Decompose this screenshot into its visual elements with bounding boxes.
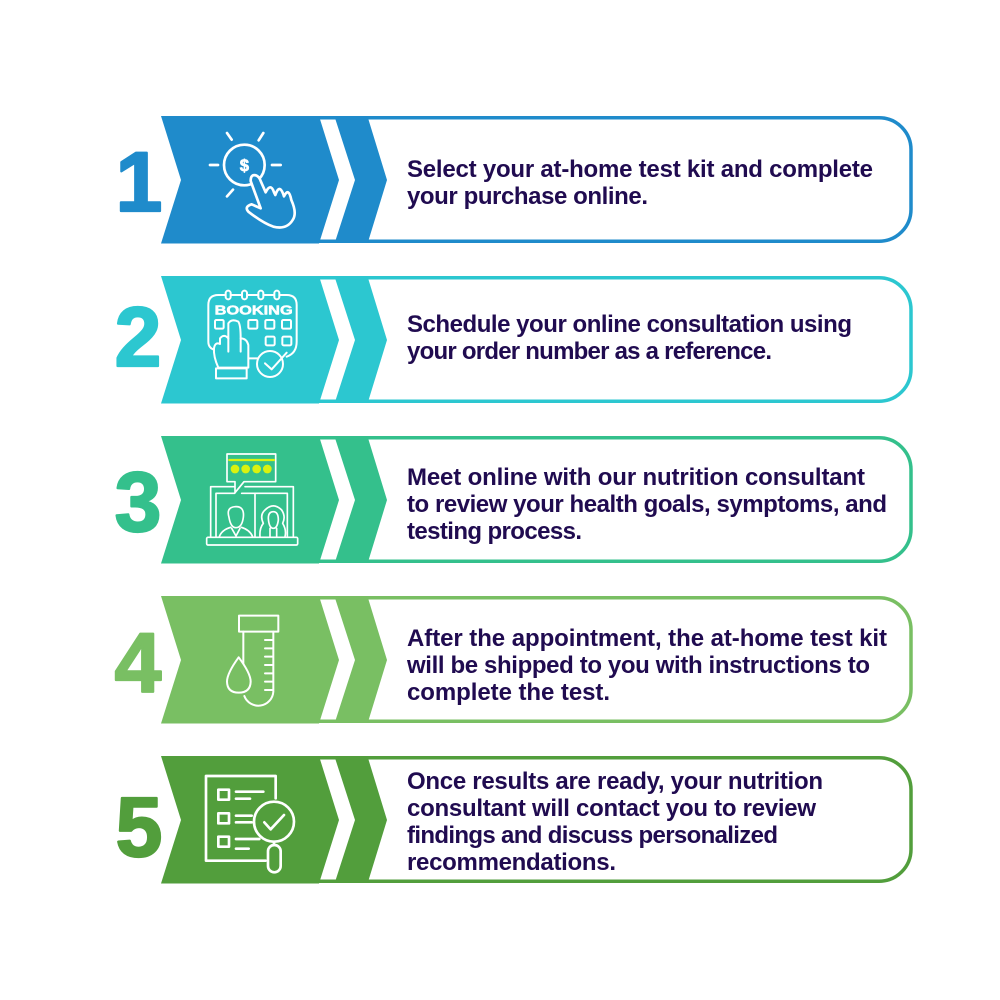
icon: hand clicking a dollar coin: $: [240, 156, 250, 175]
step 1 description: Select your at-home test kit and complete: [407, 156, 873, 183]
icon: online video consultation: [207, 454, 298, 545]
step 3 text panel: [300, 438, 911, 561]
step 1 chevron banner: [161, 116, 339, 244]
icon: booking calendar: BOOKING: [215, 302, 293, 317]
step 3 description: [407, 464, 887, 545]
step 1 number: 1: [116, 135, 162, 229]
step 4 description: [406, 625, 887, 706]
step 4 number: 4: [115, 616, 162, 710]
step 5 description: findings and discuss personalized: [407, 822, 778, 849]
step 5 description: [407, 768, 823, 876]
step 3 chevron banner: [161, 436, 339, 564]
step 2 description: your order number as a reference.: [407, 338, 772, 365]
step 2 number: 2: [115, 290, 161, 384]
step 1 row: [116, 116, 911, 244]
step 3 row: [115, 436, 911, 564]
step 3 number: 3: [115, 455, 161, 549]
step 1 description: [407, 156, 873, 210]
step 5 description: recommendations.: [407, 849, 616, 876]
step 2 description: [407, 311, 852, 365]
step 4 description: complete the test.: [407, 679, 610, 706]
step 5 number: 5: [116, 780, 162, 874]
step 2 chevron banner: [161, 276, 339, 404]
step 5 description: Once results are ready, your nutrition: [407, 768, 823, 795]
step 5 text panel: [300, 758, 911, 881]
icon: checklist with magnifier: [206, 776, 294, 872]
step 2 second chevron: [335, 278, 387, 402]
step 3 description: to review your health goals, symptoms, and: [407, 491, 887, 518]
step 2 row: [115, 276, 911, 404]
icon: booking calendar: [208, 291, 297, 378]
step 5 second chevron: [335, 758, 387, 882]
step 1 second chevron: [335, 118, 387, 242]
step 4 text panel: [300, 598, 911, 721]
step 4 row: [115, 596, 911, 724]
step 1 text panel: [300, 118, 911, 241]
step 4 description: will be shipped to you with instructions to: [406, 652, 870, 679]
step 5 description: consultant will contact you to review: [407, 795, 816, 822]
step 5 row: [116, 756, 911, 884]
icon: hand clicking a dollar coin: [210, 133, 295, 227]
step 3 description: testing process.: [407, 518, 582, 545]
step 4 chevron banner: [161, 596, 339, 724]
step 2 description: Schedule your online consultation using: [407, 311, 852, 338]
icon: test tube and drop: [227, 616, 278, 706]
step 3 second chevron: [335, 438, 387, 562]
step 4 description: After the appointment, the at-home test kit: [407, 625, 887, 652]
step 1 description: your purchase online.: [407, 183, 648, 210]
step 4 second chevron: [335, 598, 387, 722]
step 5 chevron banner: [161, 756, 339, 884]
step 2 text panel: [300, 278, 911, 401]
step 3 description: Meet online with our nutrition consultant: [407, 464, 865, 491]
